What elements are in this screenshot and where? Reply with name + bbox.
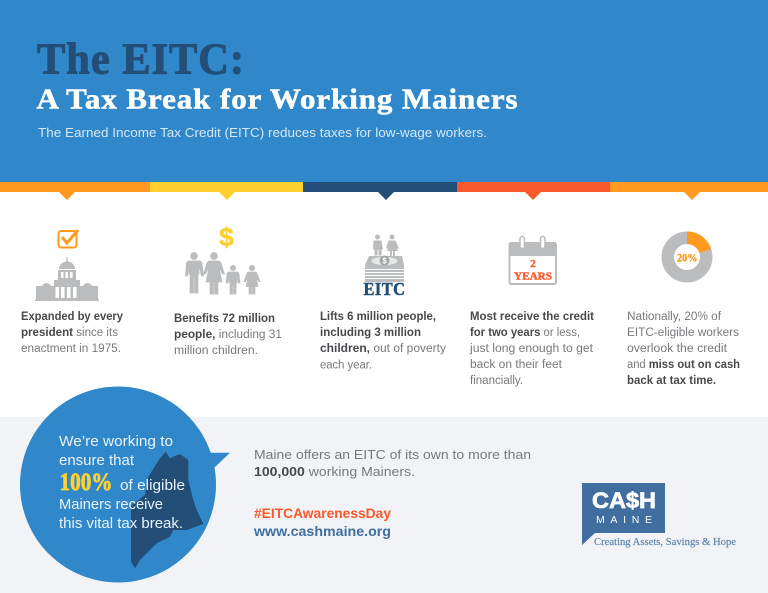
text block: benefits 72 million: people, including 31 bbox=[174, 329, 282, 341]
icon: 20 percent donut: 20% bbox=[677, 252, 698, 264]
text block: nationally 20 percent: EITC-eligible workers bbox=[627, 327, 739, 339]
icon: checkbox bbox=[58, 230, 78, 248]
logo: CASH Maine bbox=[582, 483, 736, 548]
website: www.cashmaine.org bbox=[253, 524, 391, 539]
text block: expanded by every president: enactment in 1975. bbox=[21, 343, 121, 355]
text block: lifts 6 million: children, out of poverty bbox=[320, 343, 446, 355]
text block: expanded by every president: Expanded by every bbox=[21, 311, 124, 323]
bubble message: 100% bbox=[60, 469, 112, 496]
logo: CASH Maine: MAINE bbox=[596, 514, 652, 526]
text block: nationally 20 percent: Nationally, 20% of bbox=[627, 311, 722, 323]
text block: most receive for two years: Most receive the credit bbox=[470, 311, 594, 323]
hashtag: #EITCAwarenessDay bbox=[254, 506, 391, 521]
icon: family on stack of money with EITC bbox=[364, 234, 406, 299]
EITC label: EITC bbox=[364, 279, 406, 299]
text block: most receive for two years: just long enough to get bbox=[469, 343, 594, 355]
text block: most receive for two years: financially. bbox=[470, 375, 523, 387]
icon: 20 percent donut bbox=[668, 232, 711, 276]
icon: calendar two years: YEARS bbox=[514, 270, 552, 282]
text block: Maine offers: 100,000 working Mainers. bbox=[254, 464, 415, 479]
speech bubble bbox=[20, 386, 230, 582]
text block: expanded by every president bbox=[21, 311, 124, 355]
text block: Maine offers bbox=[254, 447, 531, 479]
logo: CASH Maine: Creating Assets, Savings & Hope bbox=[594, 537, 736, 548]
text block: lifts 6 million bbox=[320, 311, 446, 372]
text block: most receive for two years: back on their feet bbox=[470, 359, 563, 371]
header panel bbox=[0, 0, 768, 183]
text block: nationally 20 percent: back at tax time. bbox=[627, 375, 716, 387]
icon: family on stack of money with EITC: $ bbox=[382, 256, 387, 266]
icon: capitol building bbox=[35, 257, 99, 301]
text block: expanded by every president: president since its bbox=[21, 327, 118, 339]
intro sentence: The Earned Income Tax Credit (EITC) reduces taxes for low-wage workers. bbox=[38, 126, 487, 140]
text block: benefits 72 million: Benefits 72 million bbox=[174, 313, 275, 325]
logo: CASH Maine: CA$H bbox=[592, 488, 656, 513]
subtitle heading: A Tax Break for Working Mainers bbox=[36, 84, 518, 116]
bubble message: this vital tax break. bbox=[59, 516, 183, 532]
bubble message: We’re working to bbox=[59, 434, 173, 450]
map of Maine bbox=[131, 452, 203, 568]
bubble message: ensure that bbox=[59, 453, 134, 469]
text block: lifts 6 million: each year. bbox=[320, 360, 372, 372]
text block: most receive for two years: for two years or less, bbox=[470, 327, 580, 339]
text block: nationally 20 percent bbox=[627, 311, 740, 387]
icon: calendar two years: 2 bbox=[530, 258, 536, 270]
text block: nationally 20 percent: and miss out on cash bbox=[627, 359, 740, 371]
bubble message bbox=[59, 434, 185, 532]
text block: Maine offers: Maine offers an EITC of its own to more than bbox=[254, 447, 531, 462]
icon: dollar sign: $ bbox=[219, 222, 234, 252]
text block: benefits 72 million bbox=[174, 313, 282, 357]
icon: family bbox=[186, 252, 260, 294]
colour band with pointers bbox=[0, 182, 768, 200]
footer panel bbox=[0, 417, 768, 593]
text block: most receive for two years bbox=[469, 311, 594, 387]
icon: calendar two years bbox=[508, 236, 557, 285]
bubble message: of eligible bbox=[120, 478, 185, 494]
title: The EITC: The EITC: bbox=[37, 34, 245, 84]
text block: benefits 72 million: million children. bbox=[174, 345, 258, 357]
text block: nationally 20 percent: overlook the credit bbox=[627, 343, 728, 355]
text block: lifts 6 million: including 3 million bbox=[320, 327, 421, 339]
bubble message: Mainers receive bbox=[59, 497, 163, 513]
text block: lifts 6 million: Lifts 6 million people, bbox=[320, 311, 436, 323]
